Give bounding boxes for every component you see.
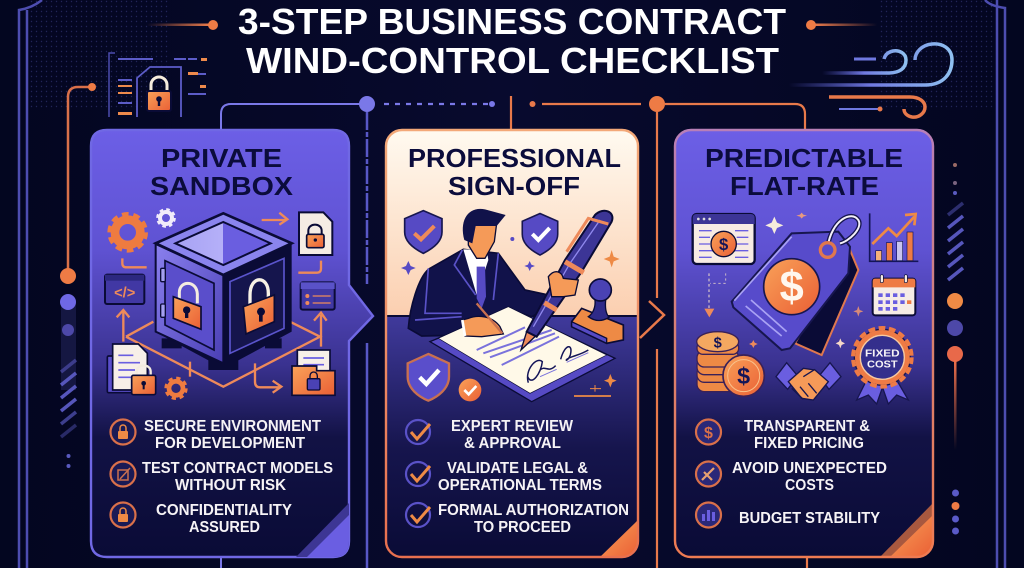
connector: purple top [221, 96, 495, 568]
icon: padlock on safe right [243, 280, 274, 334]
icon: code window: </> [114, 285, 135, 301]
icon: coin: $ [737, 363, 750, 389]
tag highlight [734, 237, 792, 301]
bullet text: transparent [744, 418, 870, 452]
bullet: edit [110, 462, 136, 486]
check on right shield [532, 228, 550, 240]
right frame lines [985, 0, 1005, 568]
bullet: lock [110, 420, 136, 444]
panel 1 heading [150, 143, 294, 201]
icon: bottom gear [166, 378, 186, 399]
icon: wind swirl [789, 44, 952, 117]
sparkles [401, 237, 620, 275]
front of tag [732, 232, 850, 350]
tag ring [820, 216, 859, 257]
bullet: confidentiality lock [110, 502, 136, 528]
right progress dots and stripes [947, 163, 963, 534]
icon: growth chart [870, 213, 918, 261]
connector: orange top [511, 96, 807, 568]
panel 2 heading: SIGN-OFF [448, 171, 580, 201]
bullet list panel 1 [110, 418, 333, 536]
icon: code window [105, 275, 144, 304]
bullet: budget chart [696, 502, 721, 528]
bullet: no surprise [696, 462, 721, 486]
panel 2 heading [408, 143, 621, 201]
panel 2 border [386, 130, 638, 557]
icon: padlock on safe left [173, 283, 201, 329]
icon: invoice window: $ [719, 235, 729, 254]
panel 3 heading: PREDICTABLE [705, 143, 903, 173]
icon: invoice window [693, 214, 755, 264]
hand with small pen [462, 303, 503, 337]
bullet text: validate legal: OPERATIONAL TERMS [438, 477, 602, 494]
bullet text: validate legal: VALIDATE LEGAL & [447, 460, 588, 477]
title [238, 1, 786, 81]
bullet text: validate legal [438, 460, 602, 494]
panel 2 heading: PROFESSIONAL [408, 143, 621, 173]
panel 1 background [91, 130, 373, 557]
paper [430, 307, 615, 402]
icon: shield bottom [408, 354, 449, 401]
bullet text: budget stability: BUDGET STABILITY [739, 510, 881, 527]
connector: orange left [60, 83, 96, 284]
bullet text: test contract models: TEST CONTRACT MODELS [142, 460, 333, 477]
bullet: check 3 [406, 503, 430, 527]
panel 3 heading [705, 143, 903, 201]
icon: coin stack [697, 332, 739, 392]
businessman [408, 209, 552, 336]
arrow: between panel 2 and 3 [640, 301, 664, 338]
bullet: check 2 [406, 462, 430, 486]
bullet text: expert review: EXPERT REVIEW [451, 418, 573, 435]
panel 1 heading: SANDBOX [150, 171, 294, 201]
bullet: check 1 [406, 420, 430, 444]
icon: fixed cost badge: FIXED [865, 349, 900, 360]
icon: shield right [522, 213, 558, 255]
bullet text: confidentiality: CONFIDENTIALITY [156, 502, 293, 519]
bullet text: test contract models: WITHOUT RISK [175, 477, 287, 494]
bullet: dollar [696, 420, 721, 444]
icon: large gear [109, 214, 146, 251]
panel 1 heading: PRIVATE [161, 143, 282, 173]
title accent: left [147, 20, 218, 30]
icon: locked folder [292, 350, 335, 395]
bullet text: confidentiality: ASSURED [189, 519, 260, 536]
icon: coin [723, 355, 764, 396]
check on left shield [414, 226, 434, 239]
left progress dots and stripes [60, 294, 76, 468]
icon: fixed cost badge: COST [867, 360, 898, 371]
bullet text: expert review: & APPROVAL [464, 435, 561, 452]
bullet text: transparent: TRANSPARENT & [744, 418, 870, 435]
panel 1 corner accent [296, 503, 349, 557]
title: 3-STEP BUSINESS CONTRACT [238, 1, 786, 42]
bullet list panel 3 [696, 418, 887, 528]
back of tag [795, 250, 858, 355]
icon: shield left [405, 211, 442, 253]
icon: handshake [776, 363, 841, 400]
icon: safe [155, 213, 292, 370]
icon: locked document bottom left [107, 344, 156, 395]
bullet text: avoid costs: COSTS [785, 477, 834, 494]
bullet text: avoid costs [732, 460, 887, 494]
icon: list window [301, 282, 335, 310]
bullet text: avoid costs: AVOID UNEXPECTED [732, 460, 887, 477]
sparkles and dashed arrow [704, 213, 863, 348]
panel 2 background [386, 130, 638, 557]
icon: check badge [459, 379, 481, 401]
background dot pattern: top right [880, 0, 995, 110]
panel 3 background [675, 130, 933, 557]
arrows around safe [117, 213, 327, 393]
large pen [521, 211, 612, 350]
left frame lines [19, 0, 42, 568]
bullet list panel 2 [406, 418, 629, 536]
panel 3 heading: FLAT-RATE [730, 171, 879, 201]
bullet text: confidentiality [156, 502, 293, 536]
bullet text: secure environment: SECURE ENVIRONMENT [144, 418, 322, 435]
bullet text: test contract models [142, 460, 333, 494]
bullet text: transparent: FIXED PRICING [754, 435, 864, 452]
bullet text: expert review [451, 418, 573, 452]
icon: locked document top right [299, 212, 332, 255]
bullet text: formal authorization [438, 502, 629, 536]
title accent: right [806, 20, 877, 30]
bullet: dollar: $ [704, 425, 713, 442]
panel 3 border [675, 130, 933, 557]
title: WIND-CONTROL CHECKLIST [246, 40, 779, 81]
panel: predictable flat-rate [675, 130, 933, 557]
bullet text: secure environment: FOR DEVELOPMENT [155, 435, 306, 452]
bullet text: formal authorization: FORMAL AUTHORIZATION [438, 502, 629, 519]
icon: calendar [873, 275, 915, 315]
illustration: safe and files [105, 209, 335, 399]
tag dollar circle: $ [780, 264, 804, 312]
icon: coin stack: $ [714, 335, 722, 351]
icon: document with lock, top left [109, 53, 207, 117]
illustration: price tag [693, 213, 918, 404]
icon: fixed cost badge [853, 328, 912, 404]
tag lines [746, 300, 787, 336]
illustration: signing businessman [401, 209, 623, 402]
bullet text: formal authorization: TO PROCEED [474, 519, 571, 536]
background dot pattern: top left [30, 0, 170, 110]
bullet text: secure environment [144, 418, 322, 452]
icon: stamp [572, 279, 623, 343]
icon: small gear [157, 209, 175, 227]
panel: professional sign-off [386, 130, 638, 557]
tag dollar circle [764, 259, 820, 315]
sparkle and line lower right [574, 374, 617, 396]
panel: private sandbox [91, 130, 373, 557]
